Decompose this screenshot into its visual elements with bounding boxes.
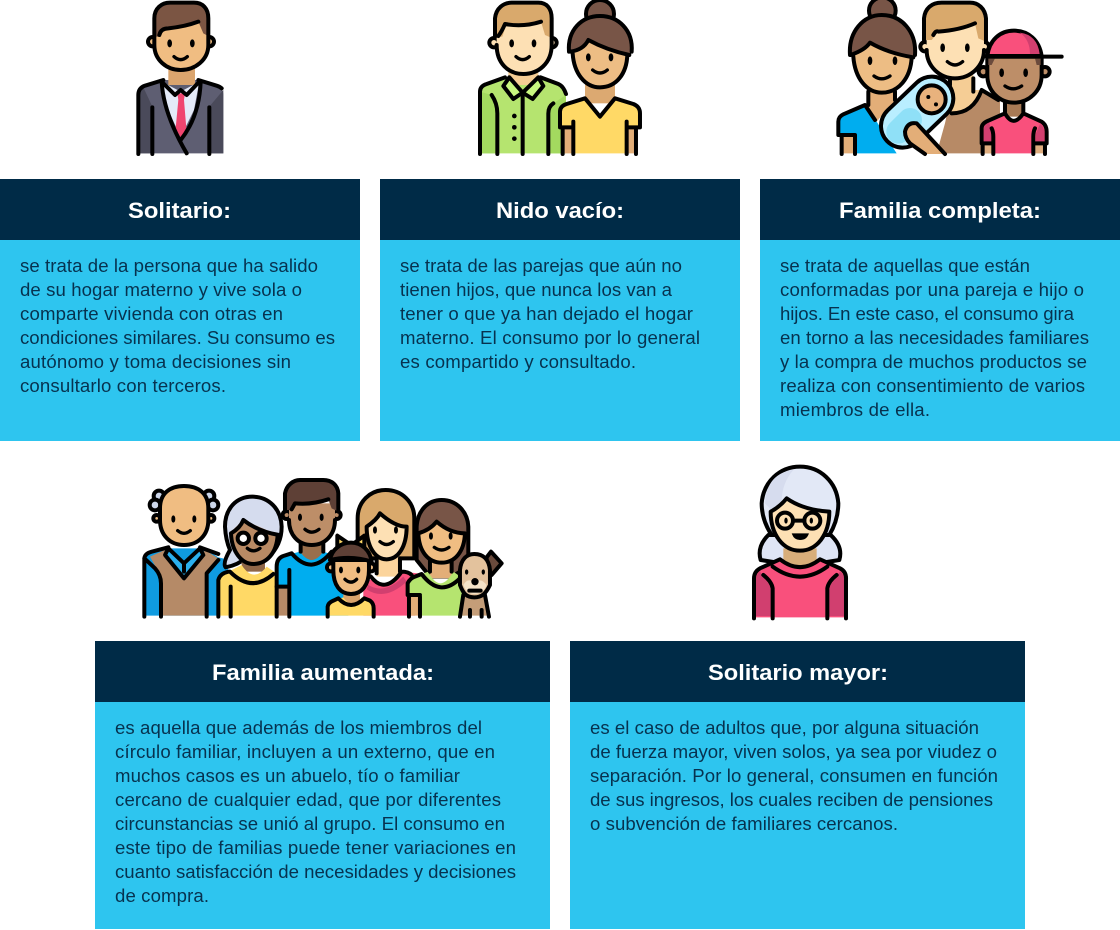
text block: Solitario description: de su hogar materno y vive sola o <box>20 279 302 300</box>
text block: Familia aumentada description: circunstancias se unió al grupo. El consumo en <box>115 813 505 834</box>
icon: young couple <box>480 0 640 154</box>
text block: Nido vacío description <box>400 255 700 372</box>
text block: Nido vacío description: tienen hijos, que nunca los van a <box>400 279 673 300</box>
heading: Familia aumentada: Familia aumentada: <box>212 660 434 685</box>
icon: single man in suit <box>138 3 223 154</box>
text block: Familia completa description: realiza con consentimiento de varios <box>780 375 1085 396</box>
text block: Solitario description: se trata de la persona que ha salido <box>20 255 318 276</box>
heading: Familia completa: Familia completa: <box>839 198 1041 223</box>
text block: Familia aumentada description <box>115 717 516 906</box>
icon: elderly woman <box>754 467 847 618</box>
icon: family with baby <box>838 0 1062 154</box>
text block: Familia aumentada description: muchos casos es un abuelo, tío o familiar <box>115 765 460 786</box>
text block: Familia completa description: se trata de aquellas que están <box>780 255 1030 276</box>
text block: Nido vacío description: materno. El consumo por lo general <box>400 327 700 348</box>
text block: Familia completa description: conformadas por una pareja e hijo o <box>780 279 1084 300</box>
text block: Familia completa description <box>780 255 1089 420</box>
text block: Solitario mayor description: es el caso de adultos que, por alguna situación <box>590 717 979 738</box>
text block: Solitario description: condiciones similares. Su consumo es <box>20 327 335 348</box>
text block: Solitario mayor description: separación. Por lo general, consumen en función <box>590 765 998 786</box>
text block: Familia aumentada description: este tipo de familias puede tener variaciones en <box>115 837 516 858</box>
text block: Familia aumentada description: de compra. <box>115 885 209 906</box>
icon: extended family with dog <box>144 480 502 617</box>
heading: Solitario: Solitario: <box>128 198 231 223</box>
panel: Solitario mayor <box>570 641 1025 929</box>
text block: Solitario mayor description: o subvención de familiares cercanos. <box>590 813 898 834</box>
panel: Familia completa <box>760 179 1120 441</box>
text block: Nido vacío description: tener o que ya han dejado el hogar <box>400 303 693 324</box>
text block: Familia completa description: hijos. En este caso, el consumo gira <box>780 303 1075 324</box>
text block: Solitario mayor description <box>590 717 998 834</box>
text block: Solitario description: consultarlo con terceros. <box>20 375 226 396</box>
heading: Solitario mayor: Solitario mayor: <box>708 660 888 685</box>
text block: Familia aumentada description: círculo familiar, incluyen a un externo, que en <box>115 741 495 762</box>
text block: Familia completa description: en torno a las necesidades familiares <box>780 327 1089 348</box>
text block: Nido vacío description: es compartido y consultado. <box>400 351 636 372</box>
panel: Nido vacío <box>380 179 740 441</box>
panel: Familia aumentada <box>95 641 550 929</box>
text block: Familia completa description: miembros de ella. <box>780 399 930 420</box>
heading: Nido vacío: Nido vacío: <box>496 198 624 223</box>
text block: Solitario description <box>20 255 335 396</box>
text block: Familia aumentada description: cercano de cualquier edad, que por diferentes <box>115 789 501 810</box>
text block: Solitario description: comparte vivienda con otras en <box>20 303 283 324</box>
panel: Solitario <box>0 179 360 441</box>
text block: Familia completa description: y la compra de muchos productos se <box>780 351 1087 372</box>
text block: Solitario mayor description: de fuerza mayor, viven solos, ya sea por viudez o <box>590 741 997 762</box>
text block: Solitario mayor description: de sus ingresos, los cuales reciben de pensiones <box>590 789 993 810</box>
text block: Familia aumentada description: es aquella que además de los miembros del <box>115 717 482 738</box>
text block: Familia aumentada description: cuanto satisfacción de necesidades y decisiones <box>115 861 516 882</box>
text block: Solitario description: autónomo y toma decisiones sin <box>20 351 291 372</box>
text block: Nido vacío description: se trata de las parejas que aún no <box>400 255 682 276</box>
